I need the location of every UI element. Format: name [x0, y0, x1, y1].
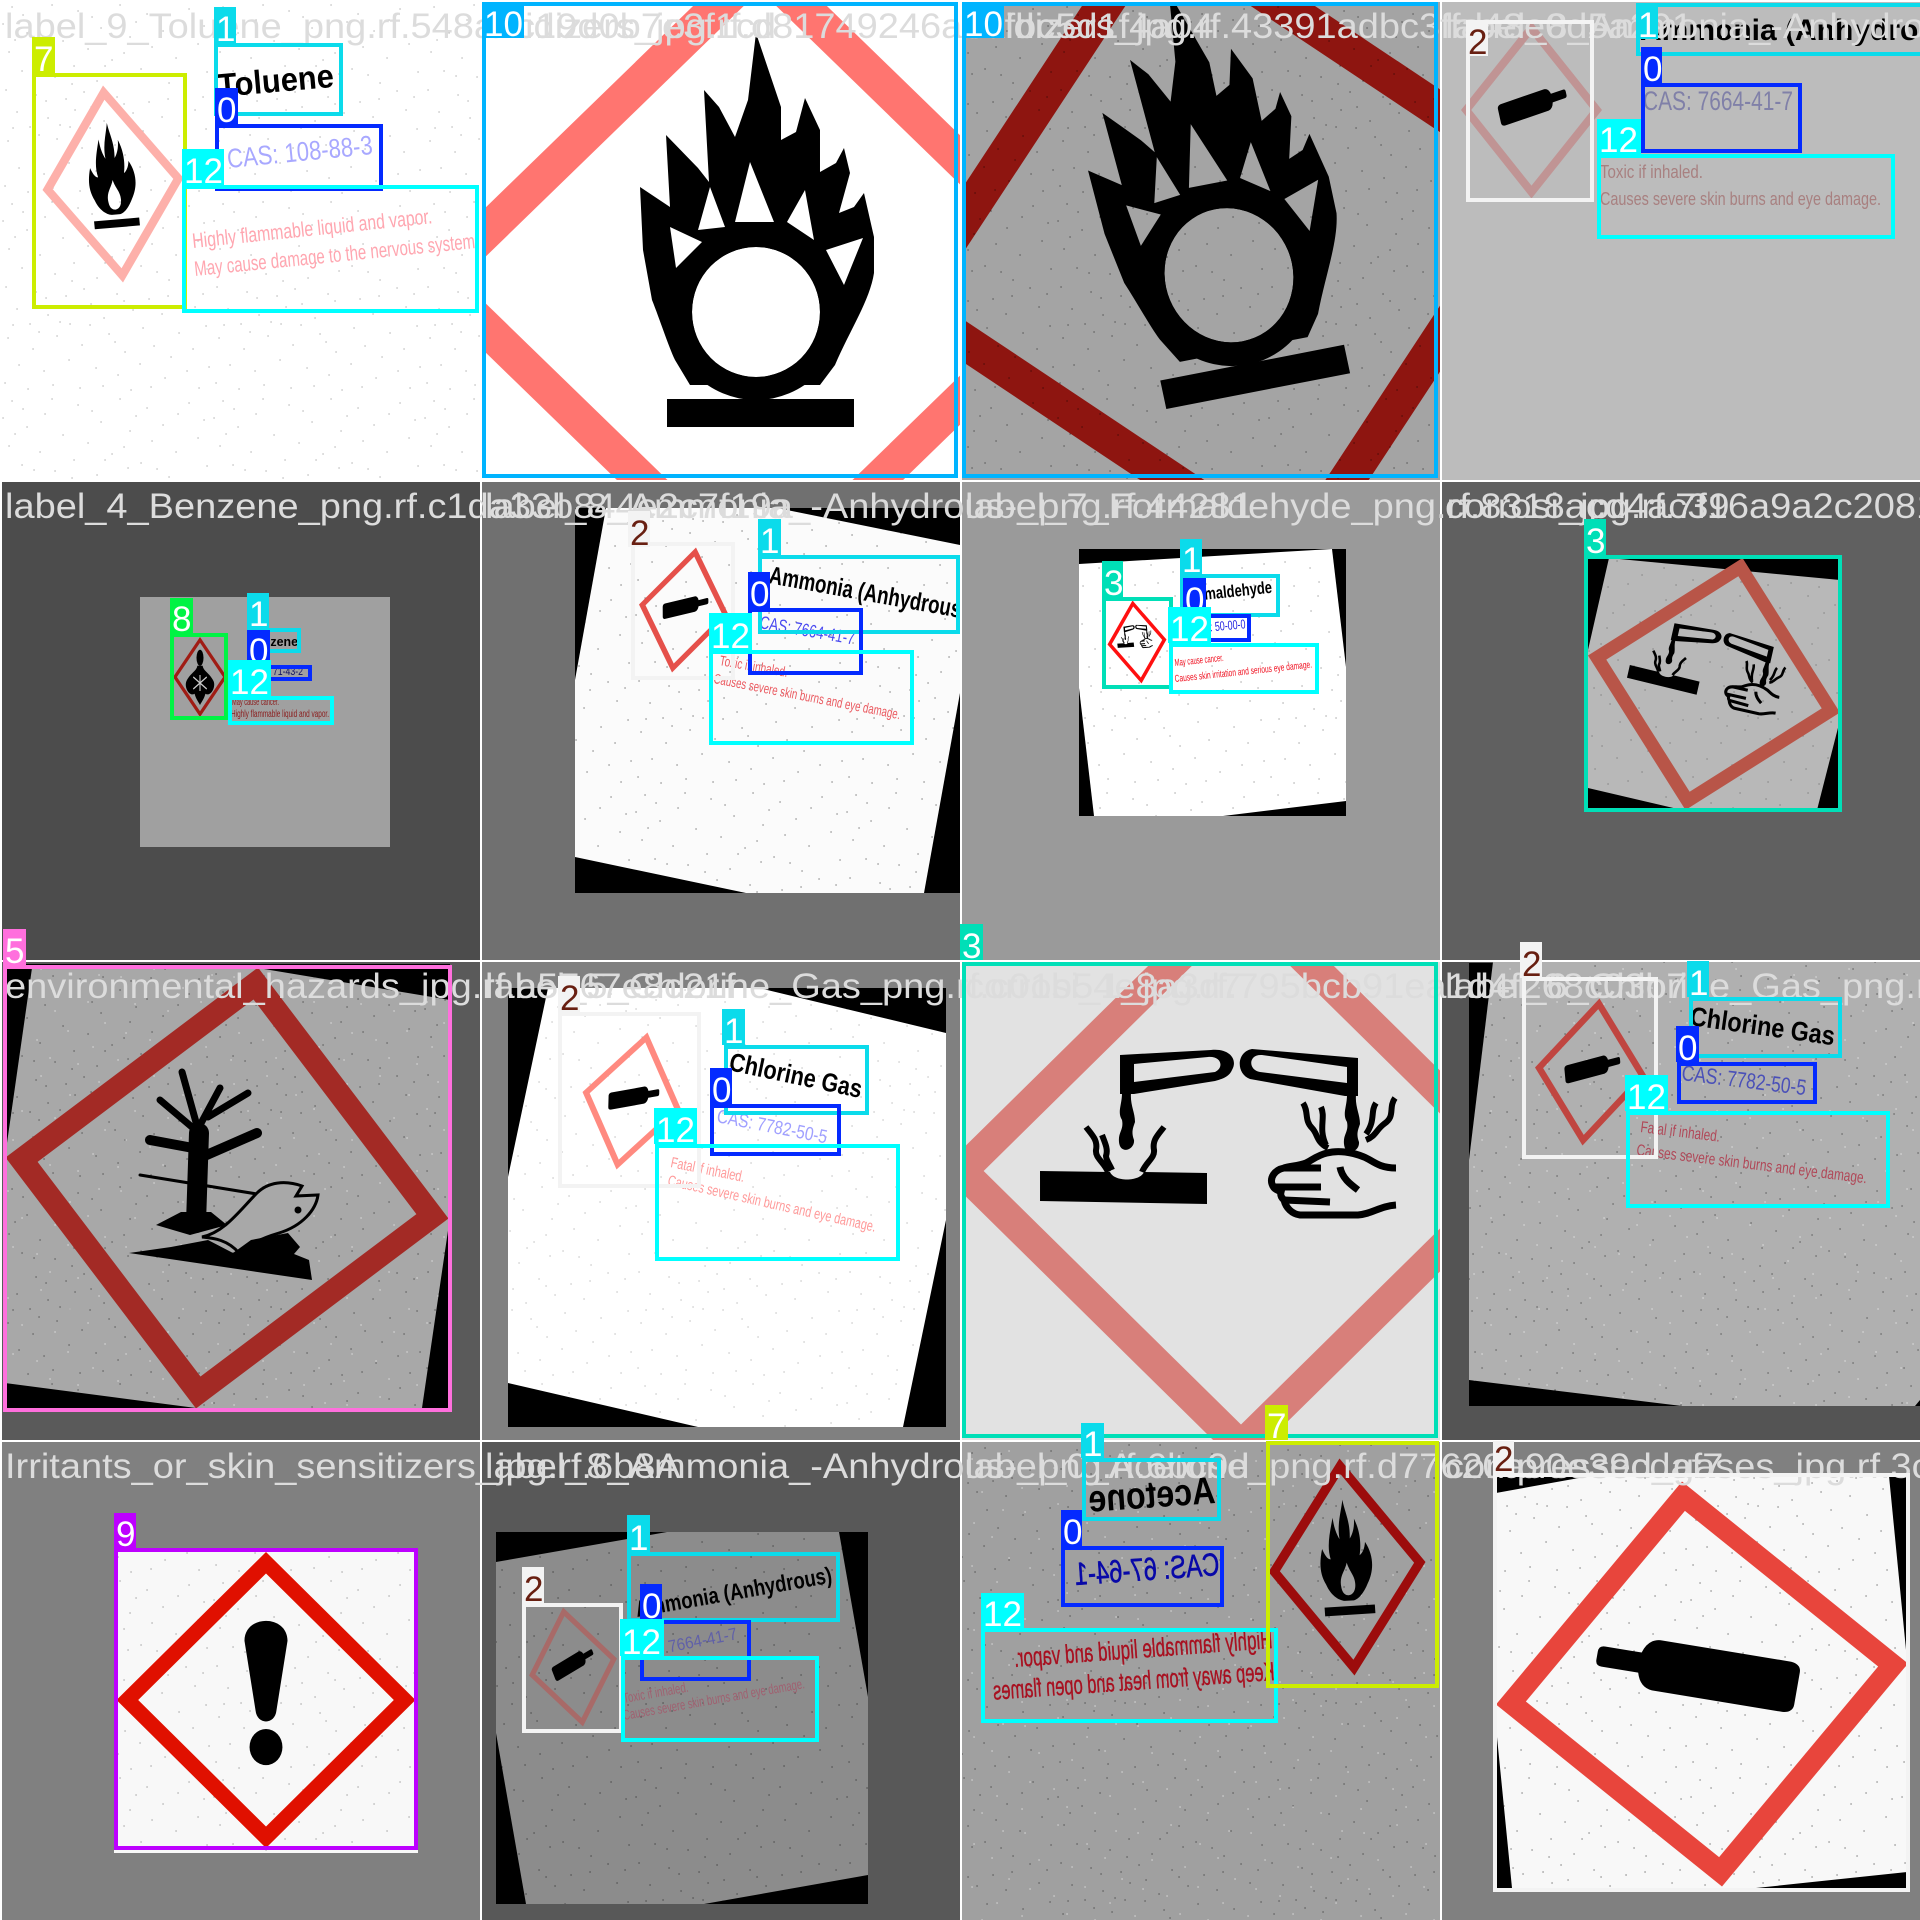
product name: Benzene — [247, 634, 298, 649]
detection box 12: 12 — [983, 1595, 1022, 1634]
detection box 1: 1 — [1083, 1425, 1102, 1464]
annotations: tile 5 — [5, 486, 794, 723]
filename: label_0_Acetone_png.rf.d77620a90e39cdaf7 — [965, 1446, 1723, 1486]
detection box 9: 9 — [116, 1515, 135, 1554]
detection box 12: 12 — [184, 152, 223, 191]
detection box 12 — [1168, 607, 1317, 692]
filename: oxidizers_jpg.rf.d81749246a59fbc5d1f4a04 — [485, 6, 1214, 46]
detection box 0: 0 — [249, 632, 268, 671]
icon: gas cylinder pictogram — [1497, 1482, 1906, 1886]
detection box 12 — [654, 1108, 898, 1259]
detection box 0 — [1641, 47, 1800, 151]
detection box 9 — [114, 1513, 416, 1848]
panel: tile 2 oxidizer pictogram — [486, 6, 960, 480]
detection box 0: 0 — [642, 1587, 661, 1626]
hazard statements: Causes severe skin burns and eye damage. — [712, 670, 902, 722]
hazard statements — [1600, 162, 1881, 209]
detection box 5: 5 — [5, 932, 24, 971]
hazard statements: May cause cancer. — [1174, 653, 1224, 669]
detection box 1: 1 — [216, 10, 235, 49]
detection box 7 — [1265, 1405, 1437, 1686]
detection box 10 — [962, 2, 1436, 476]
icon: health hazard pictogram — [173, 637, 227, 717]
detection box 5 — [3, 929, 450, 1410]
hazard statements: Toxic if inhaled. — [718, 652, 789, 680]
product name: Ammonia (Anhydrous) — [767, 561, 970, 625]
detection box 7: 7 — [34, 40, 53, 79]
hazard statements: Highly flammable liquid and vapor. — [191, 205, 433, 253]
detection box 3 — [1584, 519, 1840, 810]
CAS number: CAS: 7664-41-7 — [1643, 86, 1793, 116]
annotations: tile 2 — [482, 2, 1214, 476]
hazard statements: Fatal if inhaled. — [669, 1154, 746, 1186]
detection box 0: 0 — [1678, 1029, 1697, 1068]
panel: tile 11 corrosive pictogram large — [962, 962, 1440, 1440]
detection box 8: 8 — [172, 600, 191, 639]
icon: gas cylinder pictogram — [1526, 994, 1656, 1150]
detection box 0: 0 — [750, 575, 769, 614]
hazard statements — [714, 656, 899, 720]
detection box 12 — [620, 1619, 817, 1740]
detection box 3 — [960, 924, 1436, 1436]
detection box 8 — [170, 598, 226, 718]
hazard statements — [622, 1675, 806, 1723]
icon: gas cylinder pictogram — [567, 1024, 697, 1178]
detection box 1 — [1636, 3, 1920, 54]
filename: oxidizers_jpg.rf.43391adbc3ffa48e0d5a291 — [965, 6, 1693, 46]
detection box 12 — [228, 660, 332, 723]
icon: flame over circle — [966, 6, 1440, 480]
detection box 12 — [1625, 1075, 1888, 1206]
detection box 1: 1 — [249, 595, 268, 634]
product name: Ammonia (Anhydrous) — [633, 1562, 834, 1622]
detection box 12: 12 — [1170, 610, 1209, 649]
icon: corrosion pictogram — [966, 966, 1440, 1440]
filename: label_4_Benzene_png.rf.c1da33b844e2c7f19a — [5, 486, 794, 526]
CAS number: CAS: 108-88-3 — [226, 130, 374, 174]
hazard statements: Toxic if inhaled. — [1600, 162, 1703, 182]
annotations: tile 3 — [962, 2, 1693, 476]
hazard statements — [992, 1624, 1275, 1706]
annotations: tile 7 — [965, 486, 1730, 692]
detection box 10: 10 — [964, 5, 1003, 44]
hazard statements: Keep away from heat and open flames — [992, 1656, 1275, 1706]
detection box 1 — [627, 1515, 838, 1620]
detection box 2: 2 — [1494, 1440, 1513, 1479]
product name: Formaldehyde — [1182, 578, 1273, 606]
panel: tile 6 Ammonia label rotated — [480, 480, 970, 960]
CAS number: CAS: 67-64-1 — [1073, 1546, 1220, 1592]
detection box 0: 0 — [1185, 581, 1204, 620]
hazard statements: Causes severe skin burns and eye damage. — [622, 1675, 806, 1723]
hazard statements: Causes severe skin burns and eye damage. — [666, 1172, 878, 1236]
detection box 7: 7 — [1267, 1407, 1286, 1446]
detection box 12: 12 — [656, 1111, 695, 1150]
filename: corrosi_1_jpg.rf.795bcb91ea1d4f268c03b7e — [965, 966, 1708, 1006]
detection box 7 — [32, 37, 185, 307]
filename: label_8_Ammonia_-Anhydrous-_png.rf.44281 — [485, 486, 1252, 526]
annotations: tile 14 — [485, 1446, 1249, 1740]
detection box 2 — [1493, 1440, 1908, 1890]
detection box 2 — [558, 976, 699, 1186]
icon: flammable pictogram — [42, 86, 182, 282]
detection box 1: 1 — [1638, 6, 1657, 45]
detection box 12 — [981, 1593, 1276, 1721]
detection box 1: 1 — [724, 1012, 743, 1051]
panel: tile 13 irritant pictogram — [0, 1440, 480, 1920]
detection box 3 — [1102, 561, 1171, 687]
hazard statements: Highly flammable liquid and vapor. — [1013, 1624, 1273, 1673]
detection box 2: 2 — [560, 979, 579, 1018]
annotations: tile 1 — [5, 6, 776, 311]
filename: label_5_Chlorine_Gas_png.rf.c01b54e8a3d7 — [485, 966, 1241, 1006]
detection box 0 — [247, 630, 310, 679]
annotations: tile 9 — [3, 929, 737, 1410]
detection box 2: 2 — [1522, 945, 1541, 984]
detection box 12: 12 — [1599, 121, 1638, 160]
filename: label_8_Ammonia_-Anhydrous-_png.rf.6bc9d — [485, 1446, 1249, 1486]
panel: tile 9 environmental hazard pictogram — [0, 937, 480, 1440]
detection box 12: 12 — [622, 1623, 661, 1662]
icon: corrosion pictogram — [1103, 598, 1171, 686]
detection box 0 — [640, 1584, 749, 1679]
icon: flame over circle — [486, 6, 960, 480]
icon: gas cylinder pictogram — [639, 548, 728, 672]
detection box 3: 3 — [962, 927, 981, 966]
detection box 1 — [214, 7, 341, 114]
icon: corrosion pictogram — [1588, 559, 1838, 808]
CAS number: CAS: 7782-50-5 — [715, 1106, 829, 1148]
detection box 1: 1 — [1182, 541, 1201, 580]
annotations: tile 16 — [1445, 1440, 1920, 1890]
detection box 12: 12 — [230, 663, 269, 702]
panel: tile 16 compressed gas pictogram — [1440, 1440, 1920, 1920]
product name: Chlorine Gas — [1688, 1001, 1837, 1051]
panel: tile 3 oxidizer pictogram rotated — [962, 2, 1440, 480]
detection box 10: 10 — [484, 5, 523, 44]
detection box 0 — [748, 572, 861, 673]
detection box 1 — [1180, 539, 1278, 615]
detection box 2 — [1466, 20, 1592, 200]
detection box 12: 12 — [1627, 1078, 1666, 1117]
detection box 0 — [710, 1068, 839, 1154]
detection box 2 — [522, 1567, 621, 1731]
detection box 0 — [1061, 1510, 1222, 1605]
icon: dead tree and fish — [129, 1072, 318, 1280]
detection box 1 — [1687, 961, 1840, 1056]
detection box 3: 3 — [1104, 564, 1123, 603]
hazard statements: Highly flammable liquid and vapor. — [231, 709, 329, 720]
product name: Chlorine Gas — [727, 1047, 865, 1104]
product name: Acetone — [1087, 1470, 1217, 1521]
hazard statements: Fatal if inhaled. — [1640, 1119, 1721, 1146]
detection box 1: 1 — [629, 1519, 648, 1558]
detection box 2 — [628, 511, 733, 678]
CAS number: CAS: 7664-41-7 — [627, 1624, 739, 1664]
detection box 2 — [1520, 942, 1656, 1157]
panel: tile 14 Ammonia label dark — [480, 1440, 960, 1920]
icon: environment diamond — [0, 937, 480, 1439]
hazard statements — [1636, 1119, 1868, 1187]
filename: Irritants_or_skin_sensitizers_jpg.rf.6b8A — [5, 1446, 681, 1486]
detection box 2: 2 — [524, 1570, 543, 1609]
hazard statements — [192, 212, 475, 278]
detection box 12: 12 — [711, 617, 750, 656]
panel: tile 10 Chlorine Gas label — [480, 960, 960, 1440]
detection box 0: 0 — [712, 1071, 731, 1110]
panel: tile 4 Ammonia label — [1440, 0, 1920, 480]
hazard statements: Toxic if inhaled. — [622, 1679, 690, 1706]
panel: tile 8 corrosive pictogram — [1440, 480, 1920, 960]
detection box 0 — [1183, 578, 1249, 640]
annotations: tile 15 — [965, 1405, 1723, 1721]
detection box 10 — [482, 2, 956, 476]
hazard statements — [231, 697, 329, 720]
detection box 12 — [182, 149, 477, 311]
detection box 1: 1 — [760, 522, 779, 561]
detection box 0 — [1676, 1026, 1815, 1102]
icon: gas cylinder pictogram — [1461, 22, 1602, 198]
detection box 0: 0 — [1063, 1513, 1082, 1552]
detection box 1 — [722, 1009, 867, 1113]
panel: tile 5 Benzene label — [0, 480, 480, 960]
filename: environmental_hazards_jpg.rf.a5767e8c21f — [5, 966, 737, 1006]
hazard statements: May cause damage to the nervous system — [193, 230, 476, 281]
hazard statements — [666, 1154, 878, 1236]
icon: flammable pictogram — [1261, 1454, 1433, 1680]
CAS number: CAS: 50-00-0 — [1191, 616, 1246, 636]
detection box 2: 2 — [1468, 23, 1487, 62]
CAS number: CAS: 7782-50-5 — [1680, 1060, 1808, 1100]
detection box 0 — [215, 88, 381, 189]
detection box 3: 3 — [1586, 522, 1605, 561]
detection box 1 — [1081, 1423, 1219, 1519]
annotations: tile 4 — [1445, 3, 1920, 237]
annotations: tile 11 — [960, 924, 1708, 1436]
hazard statements: May cause cancer. — [232, 697, 279, 708]
icon: exclamation mark pictogram — [116, 1552, 416, 1848]
icon: gas cylinder pictogram — [519, 1599, 627, 1735]
CAS number: CAS: 7664-41-7 — [758, 612, 856, 649]
annotations: tile 10 — [485, 966, 1241, 1259]
detection box 1: 1 — [1689, 964, 1708, 1003]
panel: tile 1 Toluene label — [0, 0, 480, 480]
hazard statements — [1174, 653, 1313, 685]
detection box 1 — [247, 593, 299, 651]
detection box 12 — [709, 613, 912, 743]
annotations: tile 13 — [5, 1446, 681, 1848]
CAS number: CAS: 71-43-2 — [250, 666, 303, 678]
detection box 12 — [1597, 119, 1893, 237]
filename: label_9_Toluene_png.rf.548a2c19d0b7e3f1cd — [5, 6, 776, 46]
product name: Toluene — [216, 57, 335, 104]
detection box 0: 0 — [1643, 50, 1662, 89]
detection box 2: 2 — [630, 514, 649, 553]
detection box 1 — [758, 519, 958, 632]
filename: label_7_Formaldehyde_png.rf.8318acd4ac39 — [965, 486, 1730, 526]
hazard statements: Causes skin irritation and serious eye damage. — [1174, 660, 1313, 685]
detection box 0: 0 — [217, 91, 236, 130]
panel: tile 12 Chlorine Gas label grey — [1440, 960, 1920, 1440]
panel: tile 15 Acetone label mirrored — [960, 1440, 1440, 1920]
annotations: tile 6 — [485, 486, 1252, 743]
annotations: tile 8 — [1445, 486, 1920, 810]
annotations: tile 12 — [1445, 942, 1920, 1206]
panel: tile 7 Formaldehyde label — [960, 480, 1440, 960]
